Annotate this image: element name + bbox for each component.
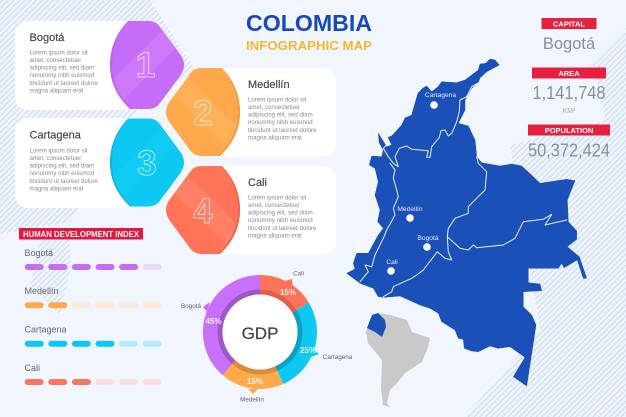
panel: Medellín card: Lorem ipsum dolor sit — [248, 96, 307, 104]
panel: Cartagena card — [15, 118, 140, 208]
marker: Cali — [386, 259, 398, 275]
panel: Bogotá card: Bogotá — [30, 32, 65, 44]
marker: Cartagena — [425, 92, 456, 109]
panel: key figures — [528, 18, 610, 160]
icon: petal 4 coral: 4 — [193, 192, 213, 231]
bar row: Cartagena — [24, 324, 162, 347]
panel: human development index — [19, 228, 162, 385]
marker: Cartagena: Cartagena — [425, 92, 456, 99]
icon: petal 1 purple — [105, 21, 184, 109]
bar row: Bogotá — [24, 248, 162, 270]
chart: GDP donut: Cali — [293, 270, 304, 278]
bar row: Cartagena: Cartagena — [24, 324, 67, 334]
bar row: Medellín: Medellín — [24, 286, 59, 296]
icon: petal 2 orange — [166, 68, 245, 156]
bar row: Bogotá: Bogotá — [24, 248, 53, 258]
panel: Cali card: amet, consectetuer — [248, 202, 300, 209]
chart: GDP donut: Cartagena — [323, 354, 353, 361]
chart: GDP donut: 25% — [300, 346, 316, 355]
bar row: Medellín — [24, 286, 162, 308]
capital label: CAPITAL — [553, 20, 585, 28]
chart: GDP donut: Medellín — [240, 396, 264, 404]
map: Colombia — [347, 59, 587, 386]
panel: Cali card: Cali — [248, 177, 267, 189]
panel: Bogotá card: nonummy nibh euismod — [30, 72, 94, 79]
map: South America locator — [366, 313, 430, 407]
panel: Cali card: nonummy nibh euismod — [248, 217, 313, 224]
panel: Cartagena card: Cartagena — [30, 130, 82, 142]
panel: Cali card: adipiscing elit, sed diam — [248, 210, 313, 217]
icon: petal 4 coral — [166, 166, 245, 254]
chart: GDP donut: 15% — [280, 288, 296, 297]
panel: Cartagena card: nonummy nibh euismod — [30, 170, 94, 177]
panel: Cartagena card: tincidunt ut laoreet dolore — [30, 178, 99, 185]
panel: Medellín card: adipiscing elit, sed diam — [248, 112, 313, 119]
capital value: Bogotá — [543, 35, 596, 53]
panel: Bogotá card: tincidunt ut laoreet dolore — [30, 80, 99, 87]
panel: Medellín card: magna aliquam erat — [248, 134, 302, 141]
chart: GDP donut: 15% — [247, 377, 263, 386]
chart: GDP donut — [181, 270, 353, 404]
marker: Medellín — [397, 206, 423, 222]
population value: 50,372,424 — [528, 140, 610, 160]
icon: petal 2 orange: 2 — [193, 94, 213, 133]
title: INFOGRAPHIC MAP — [246, 38, 372, 53]
marker: Bogotá — [417, 235, 439, 251]
chart: GDP donut: 45% — [205, 317, 222, 326]
heading: human development index: HUMAN DEVELOPMENT INDEX — [23, 230, 140, 239]
population label: POPULATION — [545, 126, 593, 135]
panel: Cali card — [210, 166, 336, 255]
panel: Medellín card: tincidunt ut laoreet dolore — [248, 127, 317, 134]
panel: Medellín card: Medellín — [248, 79, 290, 91]
icon: petal 1 purple: 1 — [136, 46, 155, 85]
panel: Medellín card: nonummy nibh euismod — [248, 119, 313, 126]
icon: petal 3 cyan — [105, 118, 184, 206]
panel: Cartagena card: Lorem ipsum dolor sit — [30, 148, 88, 154]
panel: Cali card: magna aliquam erat — [248, 232, 302, 239]
marker: Medellín: Medellín — [397, 206, 423, 213]
chart: GDP donut: GDP — [242, 324, 278, 343]
panel: Cali card: Lorem ipsum dolor sit — [248, 194, 307, 202]
bar row: Cali: Cali — [24, 363, 40, 373]
panel: Cali card: tincidunt ut laoreet dolore — [248, 225, 317, 232]
title — [246, 10, 372, 53]
marker: Cali: Cali — [386, 259, 398, 266]
pointers — [281, 279, 293, 288]
panel: Bogotá card: Lorem ipsum dolor sit — [30, 50, 88, 56]
panel: Cartagena card: adipiscing elit, sed diam — [30, 163, 94, 170]
marker: Bogotá: Bogotá — [417, 235, 439, 242]
chart: GDP donut: Bogotá — [181, 303, 201, 310]
panel: Bogotá card: amet, consectetuer — [30, 57, 81, 64]
panel: Bogotá card — [15, 21, 140, 110]
panel: Bogotá card: magna aliquam erat — [30, 87, 84, 94]
panel: Cartagena card: amet, consectetuer — [30, 155, 81, 162]
area label — [532, 68, 606, 78]
area value: 1,141,748 — [532, 83, 606, 103]
title: COLOMBIA — [246, 10, 372, 36]
area unit: KM² — [563, 108, 576, 115]
panel: Medellín card — [210, 68, 336, 157]
panel: Cartagena card: magna aliquam erat — [30, 185, 84, 192]
panel: Medellín card: amet, consectetuer — [248, 104, 300, 111]
bar row: Cali — [24, 363, 162, 385]
capital label — [542, 18, 596, 29]
icon: petal 3 cyan: 3 — [137, 144, 157, 183]
area label: AREA — [558, 69, 580, 78]
panel: Bogotá card: adipiscing elit, sed diam — [30, 65, 94, 72]
population label — [528, 124, 610, 136]
